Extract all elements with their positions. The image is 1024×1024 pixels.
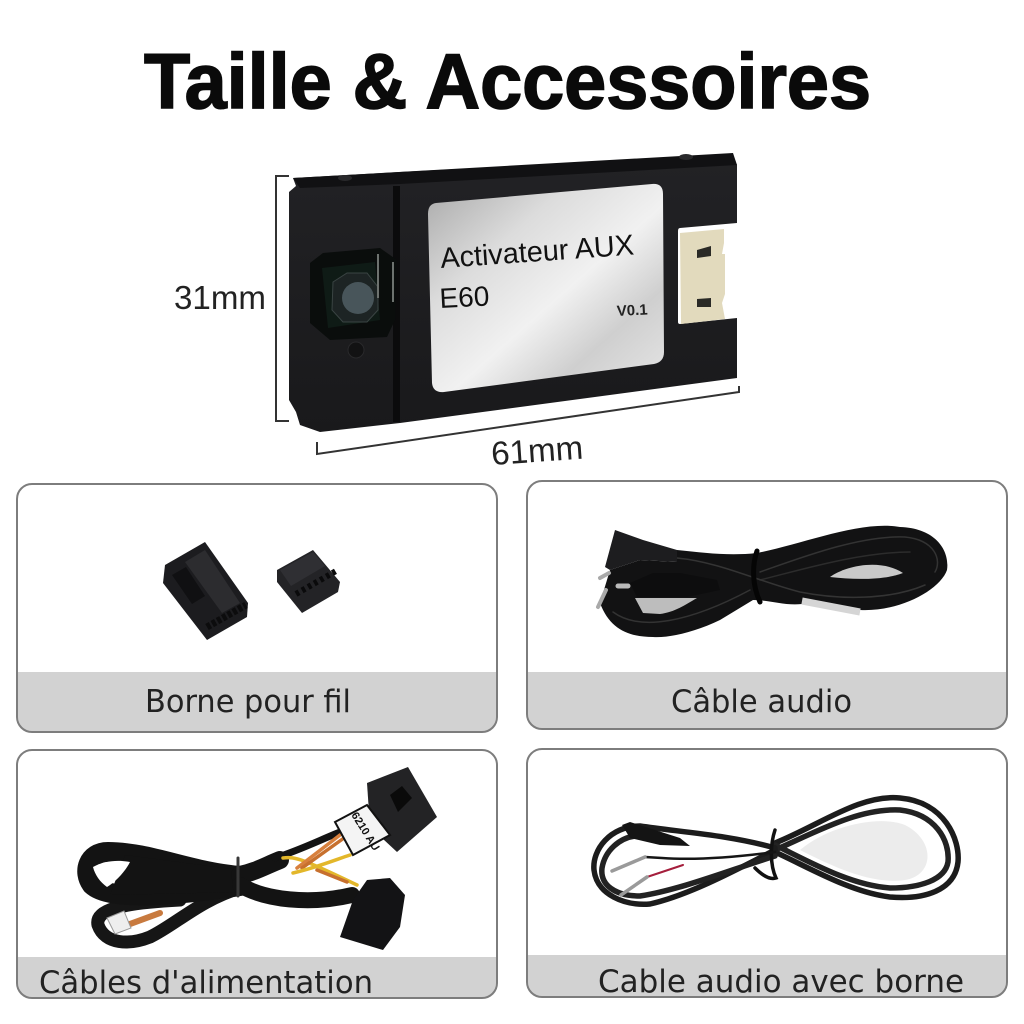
icon: small terminal connector — [277, 550, 340, 613]
label: Câbles d'alimentation — [39, 965, 373, 1001]
white wire label: 6210 AU — [348, 810, 381, 853]
module silver label: Activateur AUX — [439, 230, 635, 275]
wires — [283, 835, 357, 885]
lower connector — [340, 878, 405, 950]
dimension: 61mm: 61mm — [490, 429, 584, 472]
panel: Cable audio avec borne — [527, 749, 1007, 1000]
module button on circuit board — [310, 248, 397, 340]
title: Taille & Accessoires — [144, 37, 871, 125]
coil mass — [600, 526, 947, 637]
dimension: 31mm: 31mm — [174, 279, 266, 316]
terminal wires — [645, 852, 775, 859]
module body — [289, 153, 737, 432]
icon: large terminal connector — [163, 542, 248, 640]
sleeve to connectors — [240, 860, 280, 875]
panel: Câbles d'alimentation — [17, 750, 497, 1001]
plugs — [605, 530, 677, 570]
module connector socket — [680, 229, 725, 324]
dimension: width bracket — [317, 386, 739, 454]
dimension: height bracket — [276, 176, 289, 421]
icon: audio cable with terminals — [594, 798, 958, 904]
label: Cable audio avec borne — [598, 964, 964, 1000]
module silver label — [428, 184, 664, 392]
panel: Borne pour fil — [17, 484, 497, 732]
icon: audio cable coil — [598, 526, 947, 637]
small white plug — [130, 913, 160, 924]
silver sleeve — [802, 601, 860, 612]
module silver label: V0.1 — [616, 301, 648, 320]
panel: Câble audio — [527, 481, 1007, 729]
label: Câble audio — [671, 684, 852, 720]
coil holes — [830, 565, 903, 579]
label: Borne pour fil — [145, 684, 351, 720]
white wire label — [335, 805, 390, 855]
icon: power harness — [87, 767, 437, 950]
module silver label: E60 — [439, 280, 490, 314]
upper connector — [367, 767, 437, 852]
strand highlights — [760, 537, 937, 572]
sleeve lower loop — [98, 888, 240, 942]
sleeve upper loop — [87, 852, 240, 895]
product: AUX activator module with dimensions — [174, 153, 739, 472]
